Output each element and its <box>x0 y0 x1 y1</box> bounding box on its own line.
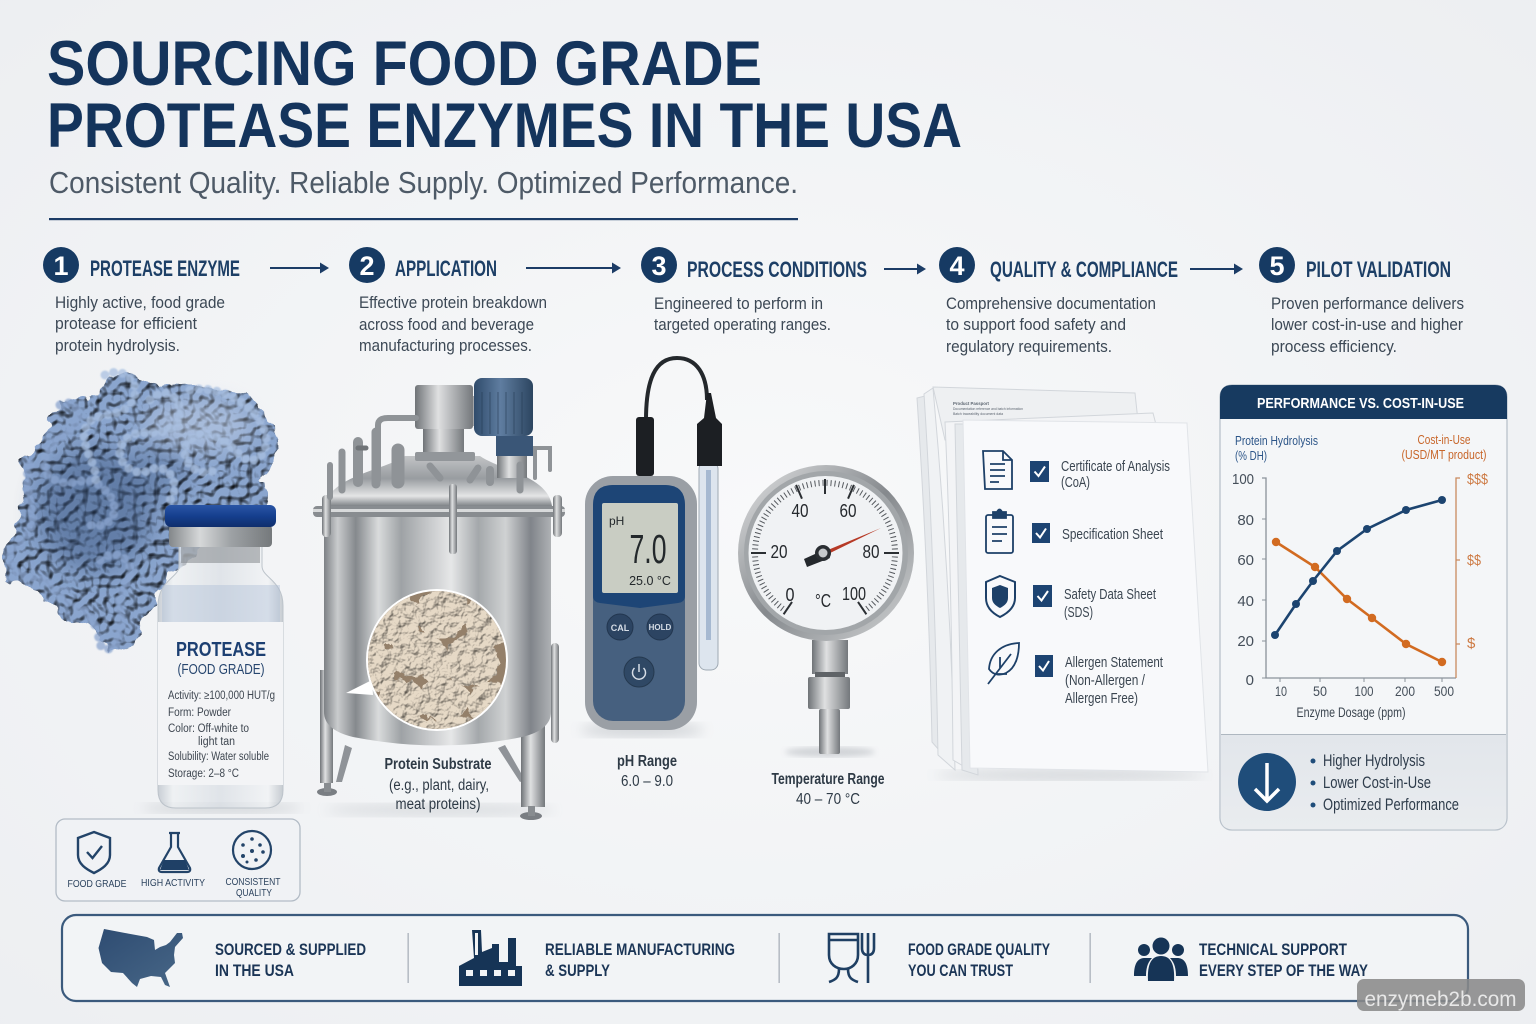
cost scale: $$ <box>1467 552 1482 569</box>
right axis title: (USD/MT product) <box>1402 448 1486 462</box>
compliance documents <box>917 387 1208 780</box>
dial numerals: 100 <box>842 583 866 604</box>
button: CAL <box>607 614 633 640</box>
step 5: pilot validation <box>1259 247 1464 356</box>
number badge 4 <box>939 247 975 283</box>
reading: 25.0 °C <box>629 574 671 588</box>
text: (Non-Allergen / <box>1065 672 1146 689</box>
number badge 1 <box>43 247 79 283</box>
dial numerals: 0 <box>786 584 794 605</box>
label: Solubility: Water soluble <box>168 751 269 763</box>
dial numerals: 20 <box>770 541 788 562</box>
watermark: enzymeb2b.com <box>1364 988 1516 1011</box>
row: certificate of analysis <box>983 451 1170 491</box>
icon: leaf <box>988 643 1019 684</box>
axes <box>1262 478 1460 682</box>
number badge 5: 5 <box>1269 251 1285 281</box>
text: Allergen Statement <box>1065 654 1164 671</box>
step 1: protease enzyme <box>43 247 240 355</box>
text: (CoA) <box>1061 474 1090 491</box>
glass body <box>158 546 283 808</box>
description: lower cost-in-use and higher <box>1271 315 1463 334</box>
description <box>359 293 547 355</box>
label: food grade: FOOD GRADE <box>68 878 126 890</box>
heading: PILOT VALIDATION <box>1306 257 1451 282</box>
number badge 3 <box>641 247 677 283</box>
dial numerals: 40 <box>792 500 808 521</box>
icon: USA map <box>98 929 183 987</box>
label: PROTEASE <box>176 639 266 661</box>
beads: upper-right chains <box>84 372 266 505</box>
description <box>55 293 225 355</box>
benefit: food grade quality: FOOD GRADE QUALITY <box>908 940 1050 959</box>
text <box>1064 586 1157 621</box>
description: Engineered to perform in <box>654 294 823 313</box>
series: cost-in-use <box>1272 538 1446 666</box>
button: power <box>624 657 654 687</box>
caption: protein substrate: (e.g., plant, dairy, <box>389 777 489 794</box>
y labels: 100 <box>1232 471 1254 488</box>
right axis title: Cost-in-Use <box>1418 433 1471 447</box>
heading: QUALITY & COMPLIANCE <box>990 257 1178 282</box>
bullets <box>1310 752 1459 814</box>
row: safety data sheet <box>986 576 1157 621</box>
label: consistent quality: CONSISTENT <box>226 876 281 888</box>
panel summary <box>1221 734 1506 829</box>
right axis title <box>1402 433 1486 462</box>
icon: factory <box>459 930 522 986</box>
title <box>47 29 962 161</box>
benefit: sourced in USA: IN THE USA <box>215 961 294 980</box>
left axis title: Protein Hydrolysis <box>1235 434 1318 448</box>
legs <box>317 643 559 820</box>
stainless tank <box>313 378 565 820</box>
caption: pH range <box>617 753 677 790</box>
button: CAL: CAL <box>611 623 630 633</box>
icon: down arrow <box>1238 753 1296 811</box>
description: process efficiency. <box>1271 337 1397 356</box>
benefit: food grade quality: YOU CAN TRUST <box>908 961 1013 980</box>
bullets: Lower Cost-in-Use <box>1323 774 1431 792</box>
neck and gearbox <box>415 385 487 461</box>
temperature gauge <box>738 465 914 757</box>
panel: performance vs cost-in-use <box>1220 385 1507 830</box>
number badge 5 <box>1259 247 1295 283</box>
label: Activity: ≥100,000 HUT/g <box>168 690 275 702</box>
arrow 1 to 2 <box>270 262 329 274</box>
arrow 3 to 4 <box>884 264 926 274</box>
major ticks <box>751 479 899 614</box>
fittings and pipes <box>330 418 550 497</box>
description: Proven performance delivers <box>1271 294 1464 313</box>
heading: PROTEASE ENZYME <box>90 256 240 281</box>
button: HOLD: HOLD <box>649 623 672 632</box>
caption: temperature range: 40 – 70 °C <box>796 791 860 808</box>
dial numerals: 60 <box>840 500 856 521</box>
reading: pH <box>609 514 624 528</box>
x labels <box>1275 683 1454 699</box>
caption: pH range: pH Range <box>617 753 677 770</box>
probe <box>697 393 722 670</box>
text: Safety Data Sheet <box>1064 586 1157 603</box>
description: Comprehensive documentation <box>946 294 1156 313</box>
bezel <box>738 465 914 641</box>
pH meter <box>580 358 722 737</box>
benefit: food grade quality <box>908 940 1050 980</box>
number badge 3: 3 <box>651 251 667 281</box>
description: across food and beverage <box>359 315 534 334</box>
icon: document <box>983 451 1012 489</box>
label: (FOOD GRADE) <box>178 661 264 678</box>
checkbox <box>1035 655 1053 677</box>
back sheet header <box>953 401 1023 416</box>
dial numerals: °C <box>815 590 831 611</box>
footer benefits bar <box>62 915 1468 1001</box>
text <box>1065 654 1164 707</box>
caption: temperature range <box>772 771 885 808</box>
caption: protein substrate <box>384 756 492 813</box>
description: protease for efficient <box>55 314 197 333</box>
stem <box>808 640 850 754</box>
cost scale <box>1467 471 1489 652</box>
description: targeted operating ranges. <box>654 315 831 334</box>
flange <box>313 506 565 517</box>
caption: protein substrate: meat proteins) <box>396 796 480 813</box>
panel header <box>1220 385 1507 419</box>
benefit: reliable manufacturing: & SUPPLY <box>545 961 611 980</box>
heading: PROCESS CONDITIONS <box>687 257 867 282</box>
cable <box>646 358 707 420</box>
description: to support food safety and <box>946 315 1126 334</box>
icon: team <box>1134 938 1188 981</box>
description <box>1271 294 1464 356</box>
meter housing <box>585 476 697 730</box>
cost scale: $ <box>1467 635 1476 652</box>
row: allergen statement <box>988 643 1164 707</box>
needle <box>804 528 881 567</box>
benefit: sourced in USA: SOURCED & SUPPLIED <box>215 940 366 959</box>
number badge 2: 2 <box>359 251 375 281</box>
back sheet header: Batch traceability document data <box>953 412 1003 416</box>
x labels: 200 <box>1395 683 1415 699</box>
vial: protease label <box>142 505 302 813</box>
arrow 2 to 3 <box>526 262 621 274</box>
back sheets <box>917 387 1160 775</box>
back sheet header: Documentation reference and batch information <box>953 407 1023 411</box>
row: specification sheet <box>986 510 1164 553</box>
badge panel: product attributes <box>56 819 300 901</box>
reading <box>609 514 671 588</box>
label: Color: Off-white to <box>168 723 249 735</box>
icon: flask <box>159 833 190 872</box>
label: high activity: HIGH ACTIVITY <box>141 877 205 889</box>
text: Certificate of Analysis <box>1061 458 1170 475</box>
benefit: technical support: TECHNICAL SUPPORT <box>1199 940 1347 959</box>
dome <box>325 456 552 506</box>
title divider <box>49 218 798 220</box>
left axis title <box>1235 434 1318 463</box>
y labels: 40 <box>1237 593 1254 610</box>
collar <box>169 525 272 547</box>
subtitle: Consistent Quality. Reliable Supply. Optimized Performance. <box>49 165 798 200</box>
x labels: 10 <box>1275 683 1287 699</box>
number badge 1: 1 <box>53 251 69 281</box>
label: consistent quality: QUALITY <box>236 887 272 899</box>
benefit: sourced in USA <box>215 940 366 980</box>
motor <box>474 378 533 478</box>
y labels: 80 <box>1237 512 1254 529</box>
caption: protein substrate: Protein Substrate <box>384 756 492 773</box>
minor ticks <box>755 483 895 611</box>
y labels <box>1232 471 1254 689</box>
icon: consistent particles <box>233 831 271 869</box>
description: manufacturing processes. <box>359 336 532 355</box>
reading: 7.0 <box>630 526 666 572</box>
button: HOLD <box>647 614 673 640</box>
icon: shield <box>986 576 1015 617</box>
label: light tan <box>198 736 235 748</box>
benefit: technical support: EVERY STEP OF THE WAY <box>1199 961 1369 980</box>
line chart <box>1232 471 1489 720</box>
series: hydrolysis <box>1271 496 1446 639</box>
dial numerals: 80 <box>862 541 880 562</box>
front page <box>963 420 1208 772</box>
blue cap <box>165 505 276 527</box>
screen <box>602 503 678 593</box>
number badge 2 <box>349 247 385 283</box>
clamps <box>322 484 562 554</box>
inset: protein substrate <box>366 589 508 731</box>
icon: food grade glass and fork <box>829 933 874 983</box>
caption: pH range: 6.0 – 9.0 <box>621 773 673 790</box>
description: protein hydrolysis. <box>55 336 180 355</box>
x labels: 100 <box>1354 683 1374 699</box>
left axis title: (% DH) <box>1235 449 1267 463</box>
text: Allergen Free) <box>1065 690 1138 707</box>
label <box>158 622 283 785</box>
back sheet header: Product Passport <box>953 401 989 406</box>
description: Effective protein breakdown <box>359 293 547 312</box>
description <box>946 294 1156 356</box>
y labels: 0 <box>1246 672 1254 689</box>
label: Form: Powder <box>168 707 231 719</box>
x labels: 500 <box>1434 683 1454 699</box>
icon: clipboard <box>986 510 1013 553</box>
checkbox <box>1032 523 1050 543</box>
step 3: process conditions <box>641 247 867 334</box>
step 2: application <box>349 247 547 355</box>
protein molecule <box>4 372 278 654</box>
label: consistent quality <box>226 876 281 899</box>
benefit: reliable manufacturing: RELIABLE MANUFACTURING <box>545 940 735 959</box>
y labels: 20 <box>1237 633 1254 650</box>
checkbox <box>1033 585 1052 607</box>
description: Highly active, food grade <box>55 293 225 312</box>
bullets: Optimized Performance <box>1323 796 1459 814</box>
caption: temperature range: Temperature Range <box>772 771 885 788</box>
inset callout pointer <box>346 680 373 695</box>
arrow 4 to 5 <box>1190 264 1243 274</box>
benefit: technical support <box>1199 940 1369 980</box>
description: regulatory requirements. <box>946 337 1112 356</box>
icon: shield check <box>78 832 110 873</box>
title: PROTEASE ENZYMES IN THE USA <box>47 91 962 161</box>
cost scale: $$$ <box>1467 471 1489 488</box>
step 4: quality and compliance <box>939 247 1178 356</box>
bullets: Higher Hydrolysis <box>1323 752 1425 770</box>
text: Specification Sheet <box>1062 526 1164 543</box>
checkbox <box>1030 461 1049 482</box>
description <box>654 294 831 334</box>
heading: APPLICATION <box>395 256 497 281</box>
watermark <box>1357 979 1525 1011</box>
number badge 4: 4 <box>949 251 965 281</box>
benefit: reliable manufacturing <box>545 940 735 980</box>
label: Storage: 2–8 °C <box>168 768 239 780</box>
beads: lower-left chains <box>10 403 130 649</box>
text: (SDS) <box>1064 604 1093 621</box>
vessel body <box>324 517 551 746</box>
panel header: PERFORMANCE VS. COST-IN-USE <box>1257 395 1464 412</box>
title: SOURCING FOOD GRADE <box>47 29 762 99</box>
x labels: 50 <box>1313 683 1327 699</box>
text <box>1061 458 1170 491</box>
x axis title: Enzyme Dosage (ppm) <box>1296 704 1406 720</box>
dial numerals <box>770 500 880 611</box>
y labels: 60 <box>1237 552 1254 569</box>
